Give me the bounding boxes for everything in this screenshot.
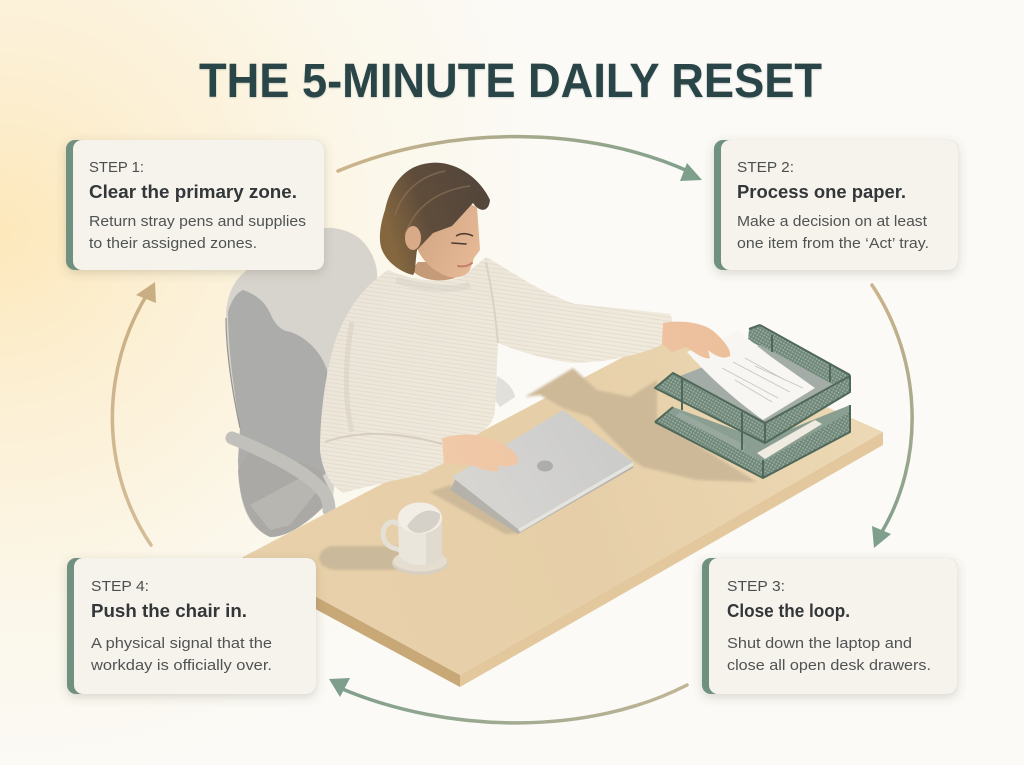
panel: step 2: Make a decision on at least xyxy=(737,214,927,230)
lower tray xyxy=(655,405,850,478)
panel: step 4: Push the chair in. xyxy=(91,601,247,621)
left hand xyxy=(442,434,518,471)
title: THE 5-MINUTE DAILY RESET xyxy=(199,55,822,108)
panel: step 4: STEP 4: xyxy=(91,578,149,595)
panel: step 1 xyxy=(66,140,324,270)
panel: step 1: Return stray pens and supplies xyxy=(89,214,306,230)
upper tray back wall xyxy=(748,325,850,392)
panel: step 2 xyxy=(714,140,958,270)
mug on coaster xyxy=(383,502,448,575)
panel: step 1: STEP 1: xyxy=(89,159,144,176)
panel: step 4 xyxy=(67,558,316,694)
desk shadows xyxy=(319,368,757,570)
letter trays xyxy=(655,325,850,478)
arrow: step 1 to step 2 xyxy=(338,137,702,181)
office chair xyxy=(226,228,515,537)
panel: step 2: Process one paper. xyxy=(737,182,906,202)
upper tray front faces xyxy=(655,373,765,443)
desk xyxy=(243,335,883,687)
paper xyxy=(687,330,815,420)
panel: step 3: STEP 3: xyxy=(727,578,785,595)
panel: step 3: Close the loop. xyxy=(727,601,850,621)
right hand xyxy=(662,322,730,358)
panel: step 1: Clear the primary zone. xyxy=(89,182,297,202)
panel: step 3 xyxy=(702,558,957,694)
panel: step 4: workday is officially over. xyxy=(90,658,272,674)
panel: step 4: A physical signal that the xyxy=(91,636,272,652)
panel: step 2: STEP 2: xyxy=(737,159,794,176)
panel: step 3: close all open desk drawers. xyxy=(727,658,931,674)
arrow: step 2 to step 3 xyxy=(872,285,912,548)
arrow: step 3 to step 4 xyxy=(329,678,687,723)
neck and face xyxy=(410,204,480,280)
panel: step 3: Shut down the laptop and xyxy=(727,636,912,652)
hair xyxy=(380,163,490,275)
upper tray floor xyxy=(680,345,838,423)
sweater and arms xyxy=(320,257,673,493)
laptop xyxy=(450,410,633,534)
panel: step 1: to their assigned zones. xyxy=(89,236,257,252)
icon: laptop logo xyxy=(537,460,553,472)
panel: step 2: one item from the ‘Act’ tray. xyxy=(737,236,929,252)
arrow: step 4 to step 1 xyxy=(112,282,156,545)
illustration: woman at desk xyxy=(226,163,883,687)
